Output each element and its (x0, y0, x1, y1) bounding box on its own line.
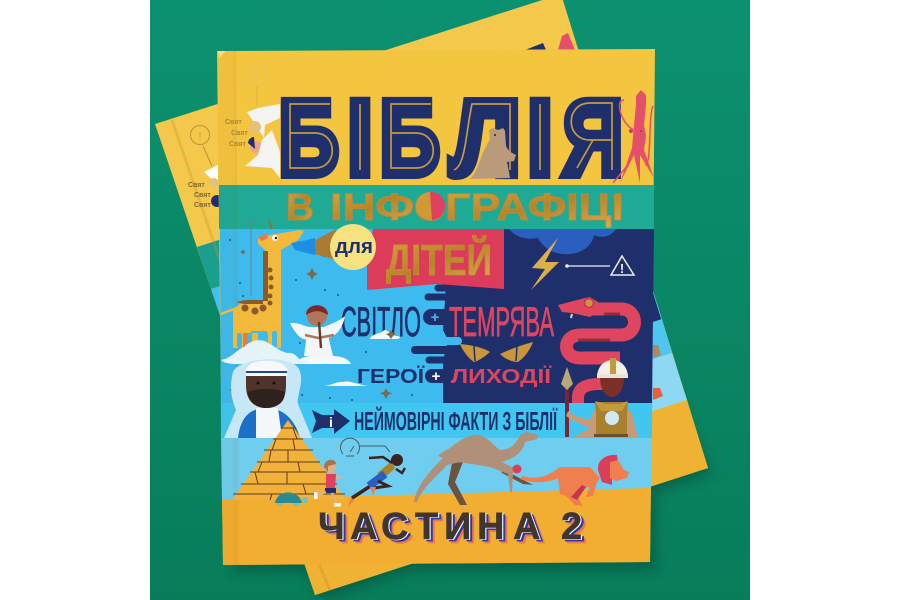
navy panel: + (432, 368, 441, 385)
storm cloud (509, 229, 616, 254)
icon: bear (470, 128, 516, 179)
teal band (219, 185, 654, 229)
heading: ЧАСТИНА 2: ЧАСТИНА 2 (319, 506, 583, 548)
text: ЛИХОДІЇ: ЛИХОДІЇ (451, 365, 552, 388)
label: для (330, 224, 376, 270)
text: СВІТЛО: СВІТЛО (341, 298, 421, 345)
icon: snake (558, 297, 634, 403)
text: ГЕРОЇ: ГЕРОЇ (357, 365, 425, 388)
green background (150, 0, 750, 600)
icon: lightning (531, 238, 559, 290)
back book details: Свят (194, 192, 211, 199)
icon: speedometer (341, 438, 390, 456)
text: angel exclamations (225, 119, 248, 148)
facts arrow (312, 409, 350, 434)
heading: ЧАСТИНА 2: ЧАСТИНА 2 (323, 510, 587, 552)
heading: ДІТЕЙ: ДІТЕЙ (386, 234, 492, 285)
text: НЕЙМОВІРНІ ФАКТИ З БІБЛІЇ: НЕЙМОВІРНІ ФАКТИ З БІБЛІЇ (354, 406, 557, 436)
back book (155, 0, 708, 595)
scattered dots (229, 239, 413, 401)
icon: exclamation circle (248, 66, 266, 106)
red banner (367, 229, 504, 290)
back book details (188, 33, 663, 400)
spine crease (217, 51, 241, 565)
icon: exclamation circle: ! (255, 68, 259, 83)
heading: БІБЛІЯ: І (528, 80, 552, 197)
back book details: Свят (194, 202, 211, 209)
icon: sprinter (348, 454, 405, 506)
heading: БІБЛІЯ: І (348, 80, 372, 197)
back book details: Свят (188, 182, 205, 189)
text: angel exclamations: Свят (225, 119, 242, 126)
icon: angel (290, 305, 351, 364)
heading: ЧАСТИНА 2: ЧАСТИНА 2 (318, 506, 582, 548)
facts strip (221, 403, 652, 438)
subtitle: В ІНФОГРАФІЦІ: О (414, 187, 446, 229)
sky strip (221, 438, 652, 500)
subtitle: В ІНФОГРАФІЦІ (286, 187, 624, 229)
icon: lion (512, 455, 629, 506)
cover base (217, 49, 655, 565)
icon: pie in letter О (416, 192, 445, 220)
icon: camel (414, 432, 538, 505)
heading: БІБЛІЯ: Б (279, 80, 338, 197)
sand (222, 488, 651, 565)
angel on title (245, 104, 280, 178)
blue panel (220, 229, 653, 440)
icon: pyramid (232, 420, 346, 500)
text: angel exclamations: Свят (231, 130, 248, 137)
text: ТЕМРЯВА: ТЕМРЯВА (449, 298, 554, 345)
facts arrow: i (329, 414, 333, 430)
icon: running child (314, 460, 342, 506)
flashlight beam (315, 229, 340, 261)
icon: warning (565, 256, 634, 276)
subtitle: В ІНФОГРАФІЦІ: ІНФ (330, 187, 414, 229)
subtitle: В ІНФОГРАФІЦІ: ГРАФІЦІ (445, 187, 624, 229)
heading: ЧАСТИНА 2: ЧАСТИНА 2 (321, 508, 585, 550)
warrior (561, 358, 638, 437)
navy panel (415, 229, 654, 403)
small clouds (324, 330, 400, 386)
heading: БІБЛІЯ: Я (564, 80, 622, 197)
heading: БІБЛІЯ: Л (451, 80, 520, 197)
text: angel exclamations: Свят (229, 141, 246, 148)
icon: cat eyes (460, 342, 533, 362)
book shadows (232, 320, 712, 600)
icon: squid (613, 90, 654, 183)
icon: warning: ! (620, 261, 624, 276)
icon: Moses (221, 340, 312, 438)
label: для: для (335, 236, 373, 258)
heading: БІБЛІЯ: Б (380, 80, 439, 197)
heading: БІБЛІЯ (279, 80, 622, 197)
back book details: ! (199, 131, 201, 142)
subtitle: В ІНФОГРАФІЦІ: В (286, 187, 314, 229)
navy panel: + (431, 309, 440, 326)
front book (217, 49, 655, 565)
icon: giraffe (221, 221, 315, 348)
stars (229, 249, 396, 399)
icon: turtle (275, 492, 308, 506)
